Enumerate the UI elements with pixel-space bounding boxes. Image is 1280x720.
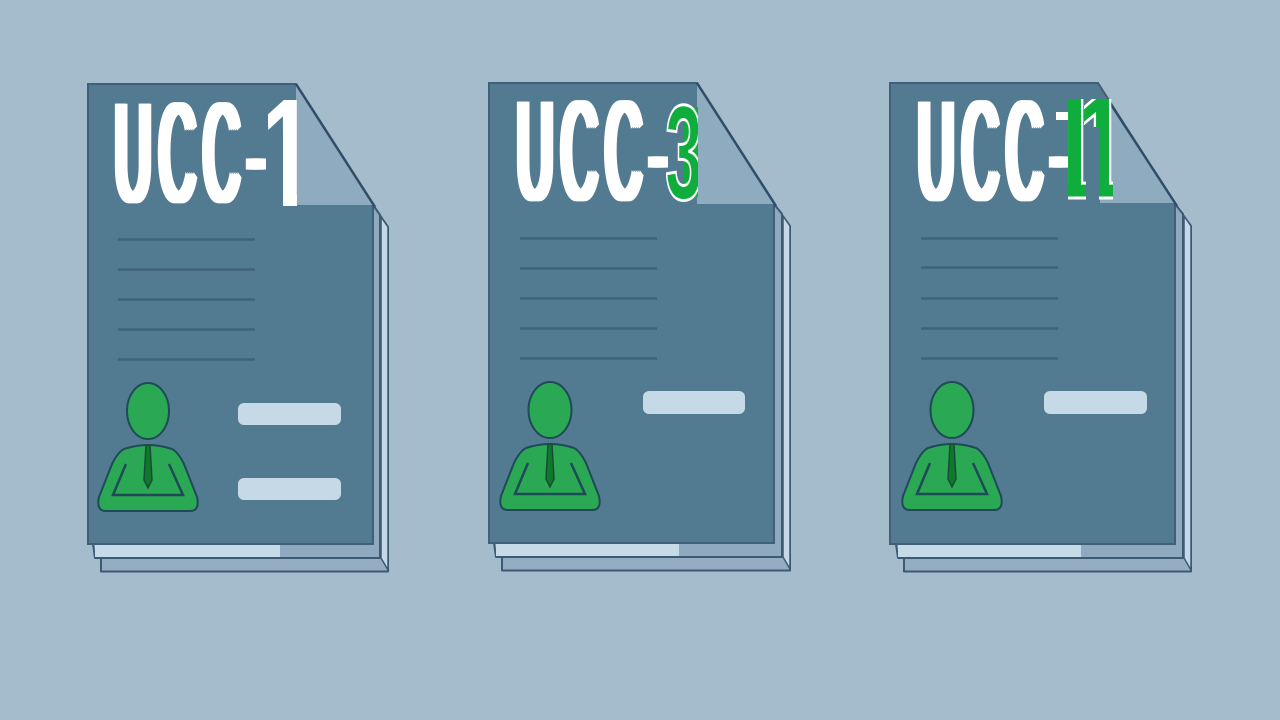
page fold — [296, 84, 373, 205]
text lines — [921, 238, 1058, 358]
heading: UCC-11: 1 — [1069, 66, 1131, 229]
back sheets — [896, 204, 1191, 572]
page — [890, 83, 1175, 544]
document: UCC-11 — [890, 83, 1191, 572]
green backing of numeral — [684, 107, 698, 197]
field bar — [1044, 391, 1147, 414]
document: UCC-3 — [489, 83, 790, 570]
page fold — [697, 83, 774, 204]
page fold — [1100, 104, 1175, 203]
document: UCC-1 — [88, 84, 388, 572]
field bars — [238, 403, 341, 500]
text lines — [118, 240, 255, 360]
text lines — [520, 238, 657, 358]
icon: person — [902, 382, 1002, 510]
heading: UCC-1: UCC- — [115, 74, 272, 233]
page — [88, 84, 373, 544]
field bar — [643, 391, 745, 414]
back sheets — [494, 204, 790, 570]
heading: UCC-11: UCC- — [918, 72, 1075, 231]
leftover numeral flag — [1056, 112, 1069, 120]
icon: person — [500, 382, 600, 510]
heading: UCC-11: 1 — [1041, 66, 1103, 229]
icon: person — [98, 383, 198, 511]
back sheets — [93, 205, 388, 572]
page — [489, 83, 774, 543]
heading: UCC-3: UCC- — [517, 72, 674, 231]
heading: UCC-3: 3 — [665, 77, 703, 228]
heading: UCC-1: 1 — [257, 67, 322, 239]
